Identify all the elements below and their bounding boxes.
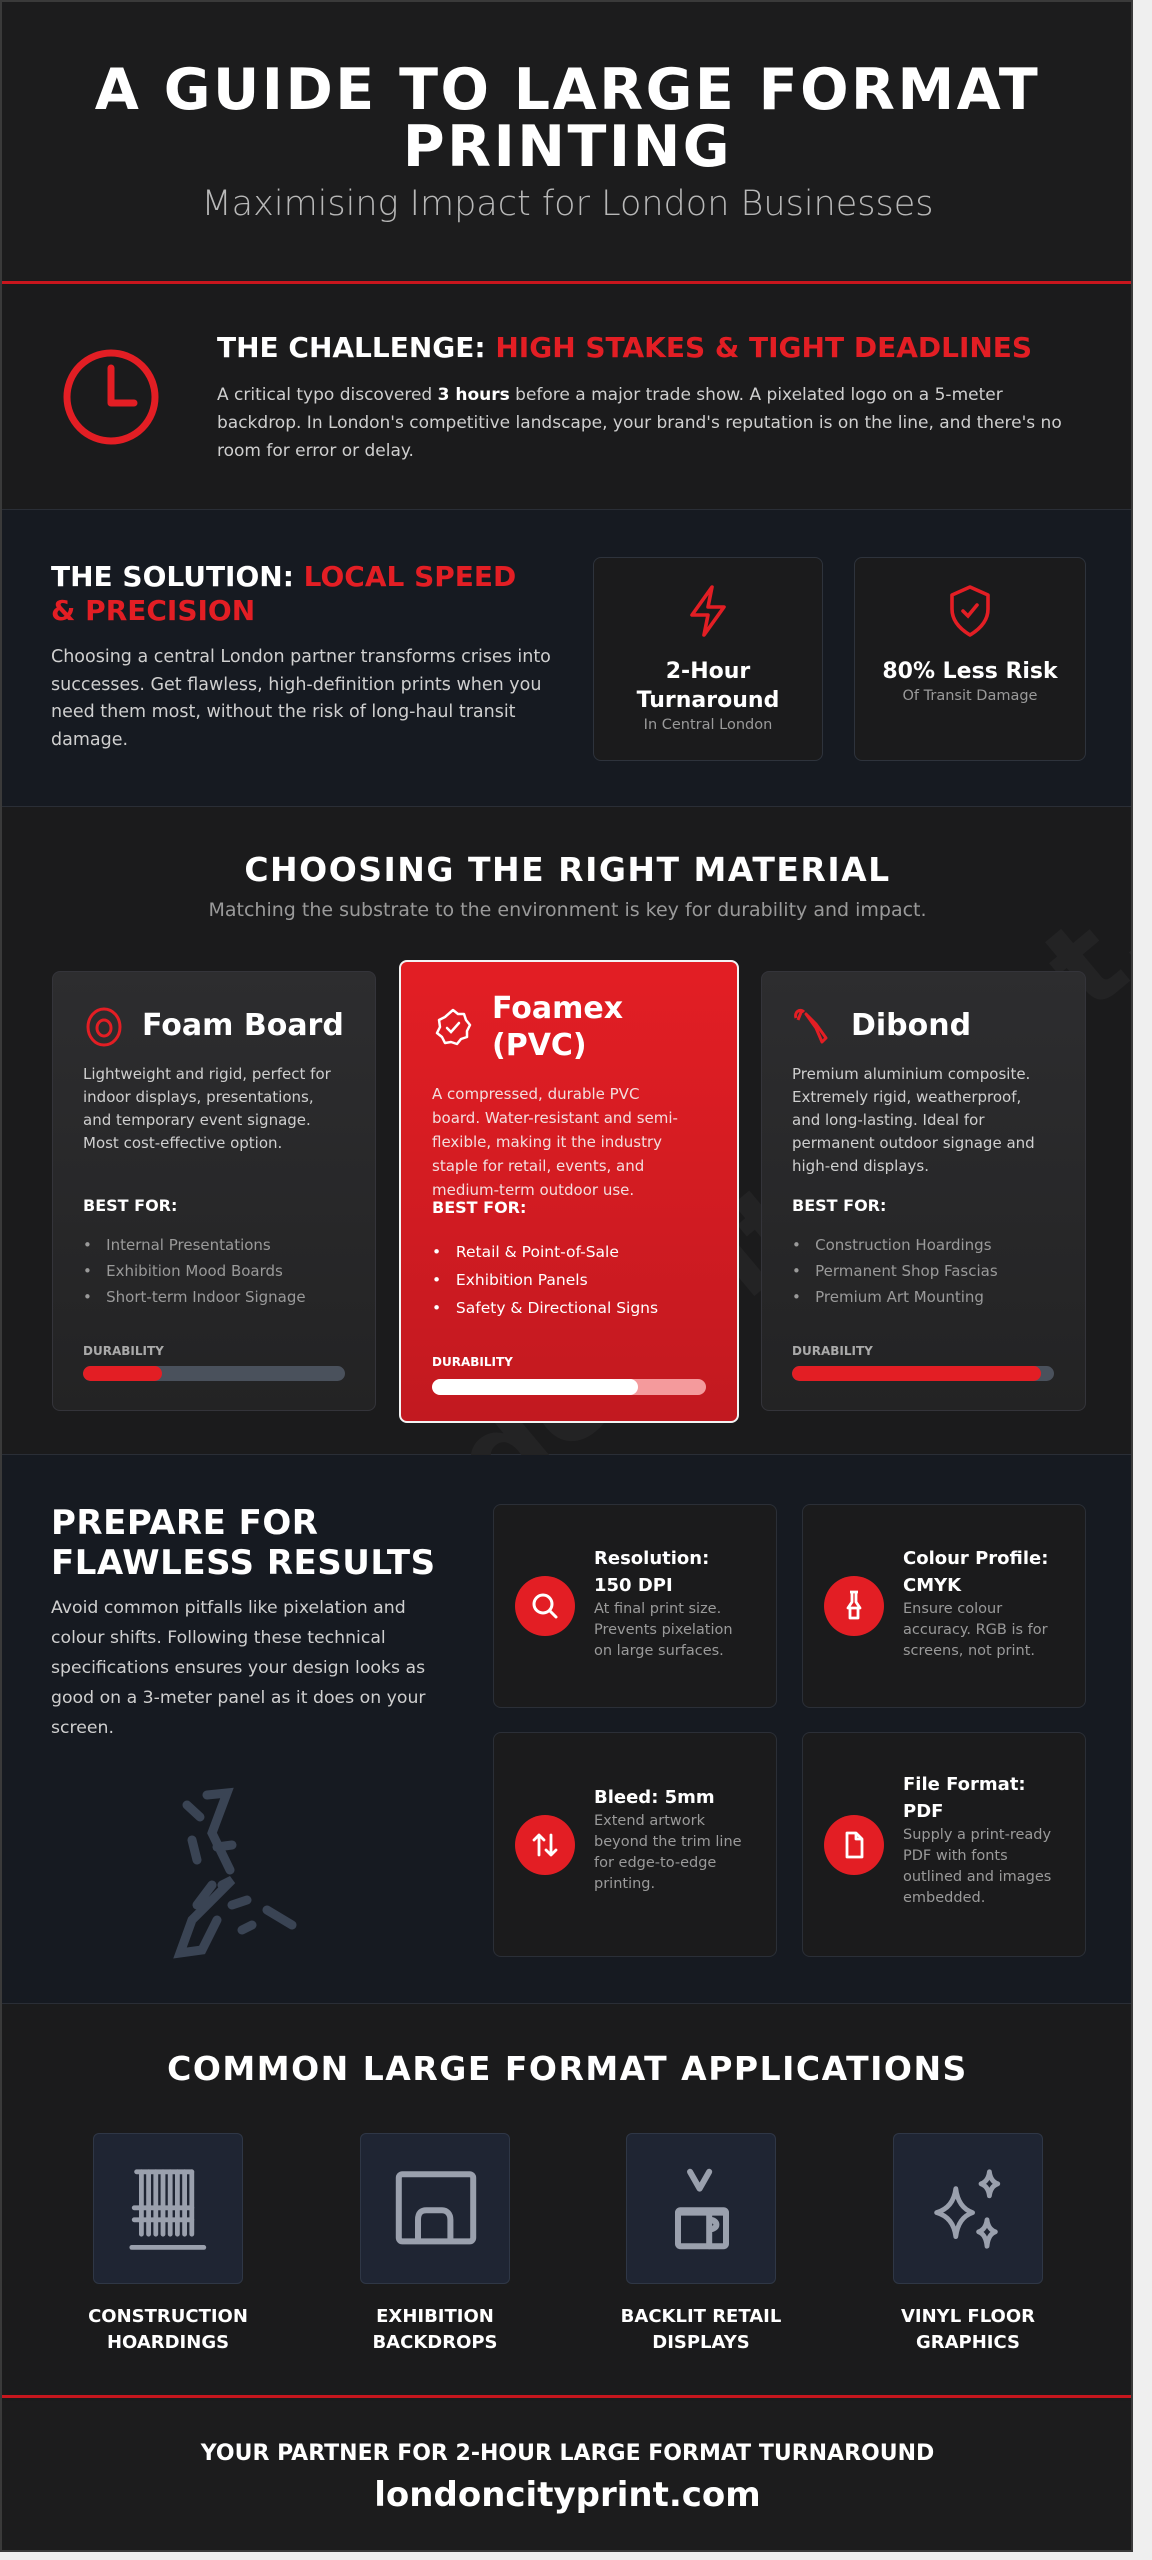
text: prepare: Avoid common pitfalls like pixelation and colour shifts. Following these technical specifications ensures your design looks as good on a 3-meter panel as it does on your screen. — [51, 1598, 426, 1738]
card: foamex: Foamex — [492, 991, 623, 1026]
item: exhibition backdrops: BACKDROPS — [372, 2332, 498, 2353]
card: dibond: • Premium Art Mounting — [792, 1288, 984, 1306]
item: vinyl floor graphics: VINYL FLOOR — [901, 2306, 1035, 2327]
title — [95, 57, 1040, 180]
card: resolution: 150 DPI — [594, 1575, 673, 1596]
card: file format: PDF — [903, 1801, 943, 1822]
card: dibond: • Construction Hoardings — [792, 1236, 992, 1254]
icon: backlit — [626, 2133, 776, 2284]
card: dibond: BEST FOR: — [792, 1196, 886, 1215]
icon: clock — [64, 350, 158, 444]
icon: arrows — [515, 1815, 575, 1875]
heading: prepare: FLAWLESS RESULTS — [51, 1543, 436, 1583]
card: foamex: • Safety & Directional Signs — [432, 1299, 658, 1317]
icon: dibond — [794, 1008, 828, 1044]
item: vinyl floor graphics: GRAPHICS — [916, 2332, 1020, 2353]
heading: solution: THE SOLUTION: LOCAL SPEED — [51, 560, 516, 593]
card: foamex: DURABILITY — [432, 1355, 513, 1369]
item: backlit retail displays — [621, 2133, 781, 2353]
icon: dropper — [824, 1576, 884, 1636]
item: backlit retail displays: DISPLAYS — [652, 2332, 750, 2353]
icon: sparkles — [893, 2133, 1043, 2284]
header — [2, 2, 1133, 284]
footer — [2, 2401, 1133, 2554]
title: A GUIDE TO LARGE FORMAT — [95, 57, 1040, 123]
icon: badge — [436, 1008, 472, 1046]
bar: foam durability — [83, 1366, 345, 1381]
item: construction hoardings — [88, 2133, 248, 2353]
heading: solution: & PRECISION — [51, 594, 255, 627]
card: dibond — [761, 971, 1086, 1411]
card: foamex: A compressed, durable PVC board. Water-resistant and semi-flexible, making it the industry staple for retail, events, and medium-term outdoor use. — [432, 1085, 678, 1199]
stat card: turnaround: Turnaround — [637, 688, 779, 713]
heading: materials: CHOOSING THE RIGHT MATERIAL — [244, 850, 891, 889]
heading: prepare — [51, 1503, 436, 1583]
card: bleed — [493, 1732, 777, 1957]
card: file format — [802, 1732, 1086, 1957]
heading: challenge: THE CHALLENGE: HIGH STAKES & TIGHT DEADLINES — [217, 331, 1032, 364]
heading: prepare: PREPARE FOR — [51, 1503, 318, 1543]
card: dibond: Premium aluminium composite. Extremely rigid, weatherproof, and long-lasting. Ideal for permanent outdoor signage and high-end displays. — [792, 1065, 1035, 1175]
icon: search — [515, 1576, 575, 1636]
card: foam board: DURABILITY — [83, 1344, 164, 1358]
subtitle: Maximising Impact for London Businesses — [201, 184, 934, 224]
stat card: less risk: Of Transit Damage — [903, 688, 1037, 704]
card: file format: File Format: — [903, 1774, 1026, 1795]
card: foam board — [52, 971, 376, 1411]
panel: solution — [2, 510, 1133, 807]
item: construction hoardings: CONSTRUCTION — [88, 2306, 248, 2327]
card: resolution: Resolution: — [594, 1548, 709, 1569]
text: solution: Choosing a central London partner transforms crises into successes. Get flawless, high-definition prints when you need them most, without the risk of long-haul transit damage. — [51, 647, 551, 750]
panel: challenge — [2, 285, 1133, 510]
card: foamex: • Exhibition Panels — [432, 1271, 588, 1289]
stat card: turnaround: In Central London — [644, 717, 772, 733]
stat card: turnaround: 2-Hour — [666, 659, 750, 684]
card: file format: Supply a print-ready PDF with fonts outlined and images embedded. — [903, 1827, 1051, 1906]
icon: decorative brush — [173, 1788, 296, 1958]
item: construction hoardings: HOARDINGS — [107, 2332, 229, 2353]
card: dibond: DURABILITY — [792, 1344, 873, 1358]
card: foamex: BEST FOR: — [432, 1198, 526, 1217]
panel: applications — [2, 2004, 1133, 2398]
item: exhibition backdrops — [360, 2133, 510, 2353]
card: foam board: • Exhibition Mood Boards — [83, 1262, 283, 1280]
card: foam board: BEST FOR: — [83, 1196, 177, 1215]
icon: backdrop — [360, 2133, 510, 2284]
panel: materials — [2, 807, 1133, 1455]
card: bleed: Bleed: 5mm — [594, 1787, 715, 1808]
item: backlit retail displays: BACKLIT RETAIL — [621, 2306, 781, 2327]
footer url: londoncityprint.com — [374, 2475, 761, 2515]
footer tagline: YOUR PARTNER FOR 2-HOUR LARGE FORMAT TURNAROUND — [201, 2441, 934, 2466]
icon: file — [824, 1815, 884, 1875]
card: foamex: (PVC) — [492, 1028, 587, 1063]
item: exhibition backdrops: EXHIBITION — [376, 2306, 494, 2327]
stat card: less risk — [854, 557, 1086, 761]
card: colour profile — [802, 1504, 1086, 1708]
heading: applications: COMMON LARGE FORMAT APPLICATIONS — [167, 2049, 968, 2088]
card: dibond: • Permanent Shop Fascias — [792, 1262, 998, 1280]
subtitle: materials: Matching the substrate to the environment is key for durability and impact. — [208, 899, 927, 921]
card: foam board: Lightweight and rigid, perfect for indoor displays, presentations, and temporary event signage. Most cost-effective option. — [83, 1065, 331, 1152]
stat card: less risk: 80% Less Risk — [882, 659, 1058, 684]
card: resolution: At final print size. Prevents pixelation on large surfaces. — [594, 1601, 733, 1659]
icon: hoarding — [93, 2133, 243, 2284]
title: PRINTING — [403, 114, 732, 180]
card: resolution — [493, 1504, 777, 1708]
stat card: turnaround — [593, 557, 823, 761]
icon: shield — [950, 585, 990, 637]
card: foam board: • Short-term Indoor Signage — [83, 1288, 306, 1306]
item: vinyl floor graphics — [893, 2133, 1043, 2353]
icon: lightning — [690, 585, 726, 637]
card: foamex — [399, 960, 739, 1423]
heading: solution — [51, 560, 516, 627]
text: challenge: A critical typo discovered 3 hours before a major trade show. A pixelated logo on a 5-meter backdrop. In London's competitive landscape, your brand's reputation is on the line, and there's no room for error or delay. — [217, 385, 1062, 461]
card: colour profile: Ensure colour accuracy. RGB is for screens, not print. — [903, 1601, 1048, 1659]
bar: foamex durability — [432, 1379, 706, 1395]
card: bleed: Extend artwork beyond the trim line for edge-to-edge printing. — [594, 1813, 742, 1892]
card: foam board: Foam Board — [142, 1008, 344, 1043]
card: foam board: • Internal Presentations — [83, 1236, 271, 1254]
card: colour profile: CMYK — [903, 1575, 961, 1596]
bar: dibond durability — [792, 1366, 1054, 1381]
card: dibond: Dibond — [851, 1008, 971, 1043]
panel: prepare — [2, 1455, 1133, 2004]
card: foamex: • Retail & Point-of-Sale — [432, 1243, 619, 1261]
card: colour profile: Colour Profile: — [903, 1548, 1048, 1569]
icon: foam — [86, 1008, 122, 1046]
